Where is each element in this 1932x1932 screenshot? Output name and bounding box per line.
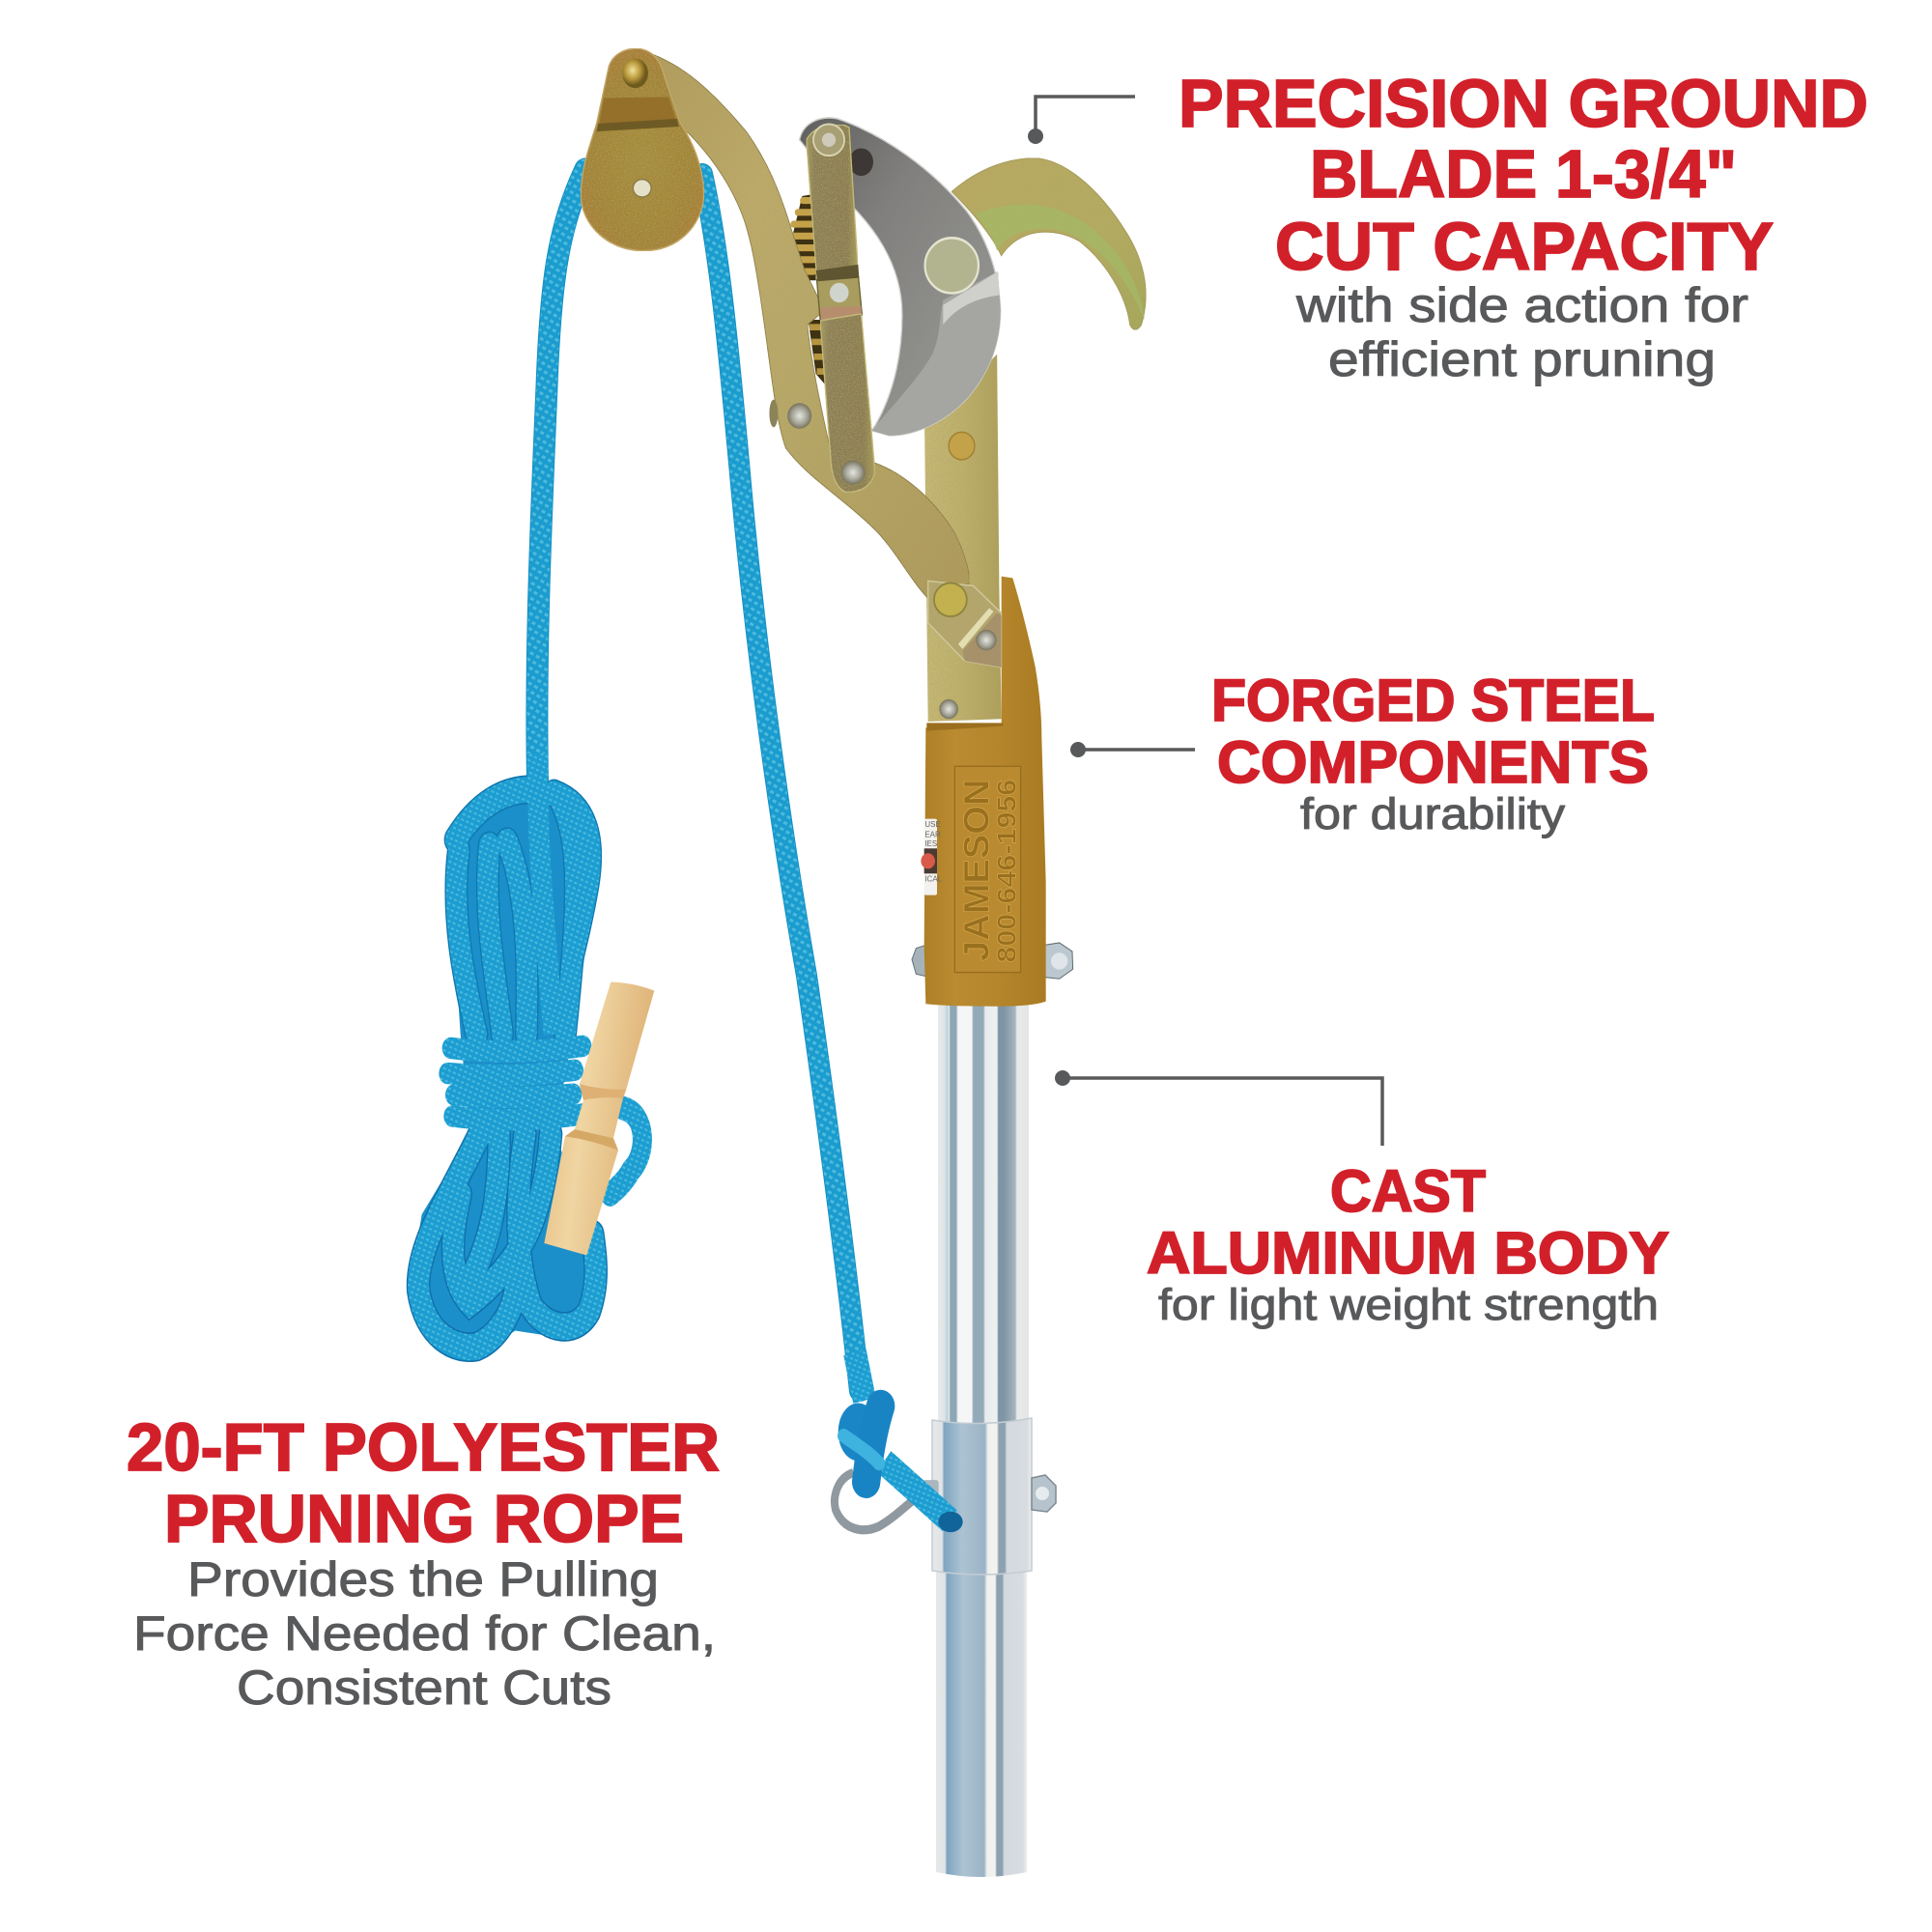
embossed badge: JAMESON	[955, 780, 996, 961]
pole sleeve	[932, 1418, 1032, 1575]
coil lower strand outlines	[418, 1134, 596, 1348]
callout: blade text: efficient pruning	[1328, 332, 1716, 386]
left nut	[912, 945, 925, 977]
loop behind toggle	[611, 1108, 642, 1194]
bracket rivet	[976, 630, 997, 650]
callout: pruning rope text: Provides the Pulling	[187, 1552, 659, 1606]
coil spring	[790, 194, 829, 388]
warning label	[921, 819, 943, 895]
callout: aluminum body leader line	[1055, 1070, 1382, 1146]
callout: forged steel text: FORGED STEEL	[1211, 668, 1655, 733]
top link bolt	[813, 124, 844, 156]
rear pin	[769, 400, 778, 427]
upper link plate	[807, 125, 858, 278]
upper pole tube	[938, 1000, 1029, 1425]
warning label: IES	[924, 839, 937, 848]
collar top ledge	[926, 723, 1003, 731]
left rope strand	[537, 169, 585, 802]
coil lower strands	[418, 1134, 596, 1348]
callout: blade text: with side action for	[1295, 278, 1748, 332]
shackle ring	[835, 1473, 913, 1530]
rope running through pulley	[537, 169, 860, 1391]
pivot disc	[925, 238, 979, 293]
warning label: EAR	[924, 831, 941, 839]
left sleeve nut	[923, 1480, 939, 1495]
aluminum pole	[932, 1000, 1056, 1877]
callout: blade leader line	[1028, 97, 1135, 144]
coil upper strands	[456, 789, 590, 1034]
corner bracket	[928, 581, 1002, 719]
hook jaw	[952, 158, 1146, 329]
right nut	[1045, 943, 1073, 979]
callout: aluminum body text: ALUMINUM BODY	[1147, 1220, 1669, 1286]
right sleeve bolt	[1032, 1475, 1056, 1512]
embossed badge	[954, 766, 1022, 973]
lower rivet	[939, 699, 958, 719]
callout: pruning rope text: Consistent Cuts	[237, 1661, 611, 1715]
callout: blade text: BLADE 1-3/4"	[1310, 136, 1737, 212]
right rope strand	[702, 174, 860, 1391]
coiled rope bundle with wooden toggle	[409, 753, 654, 1358]
pulley band	[598, 97, 678, 130]
bypass blade	[800, 118, 1001, 436]
blade bevel	[872, 271, 1001, 436]
cast aluminum collar	[912, 577, 1073, 1007]
link plates	[807, 124, 875, 493]
lower pole tube	[936, 1570, 1027, 1877]
callout: pruning rope text: 20-FT POLYESTER	[127, 1409, 720, 1485]
callout: forged steel text	[1211, 668, 1655, 838]
pulley top rivet	[622, 59, 648, 88]
coil upper strand outlines	[456, 789, 590, 1034]
pulley cheek	[581, 48, 704, 251]
rope knot	[838, 1352, 881, 1482]
knot and shackle at sleeve	[835, 1352, 963, 1532]
callout: forged steel text: for durability	[1300, 789, 1566, 838]
embossed badge: 800-646-1956	[992, 780, 1022, 963]
collar body	[924, 577, 1046, 1007]
handle rivets	[787, 403, 975, 484]
coil back fill	[409, 781, 599, 1358]
wooden toggle	[544, 981, 654, 1255]
callout: blade text	[1179, 66, 1868, 386]
callout: pruning rope text: Force Needed for Clean,	[133, 1606, 716, 1661]
main body bar	[924, 355, 1002, 722]
blade bolt hole	[849, 148, 873, 176]
callout: blade text: PRECISION GROUND	[1179, 66, 1868, 141]
pruner head	[581, 48, 1146, 722]
rope wraps	[447, 1046, 582, 1120]
bracket bolt	[934, 582, 967, 616]
warning label: ICAL	[924, 875, 943, 884]
callout: pruning rope text	[127, 1409, 720, 1715]
callout: aluminum body text	[1147, 1158, 1669, 1329]
rope tail	[884, 1462, 950, 1520]
main rope into coil	[538, 753, 554, 1034]
callout: aluminum body text: CAST	[1330, 1158, 1486, 1224]
callout: aluminum body text: for light weight strength	[1158, 1280, 1659, 1329]
hook bevel	[976, 205, 1145, 320]
callout: forged steel text: COMPONENTS	[1217, 729, 1649, 795]
warning label: USE	[924, 820, 941, 829]
callout: pruning rope text: PRUNING ROPE	[164, 1481, 684, 1556]
callout: forged steel leader line	[1070, 742, 1195, 757]
pulley arm	[639, 49, 969, 598]
callout: blade text: CUT CAPACITY	[1275, 209, 1774, 284]
lower link plate	[820, 314, 875, 493]
center joint	[817, 274, 862, 320]
pulley axle rivet	[633, 180, 651, 197]
